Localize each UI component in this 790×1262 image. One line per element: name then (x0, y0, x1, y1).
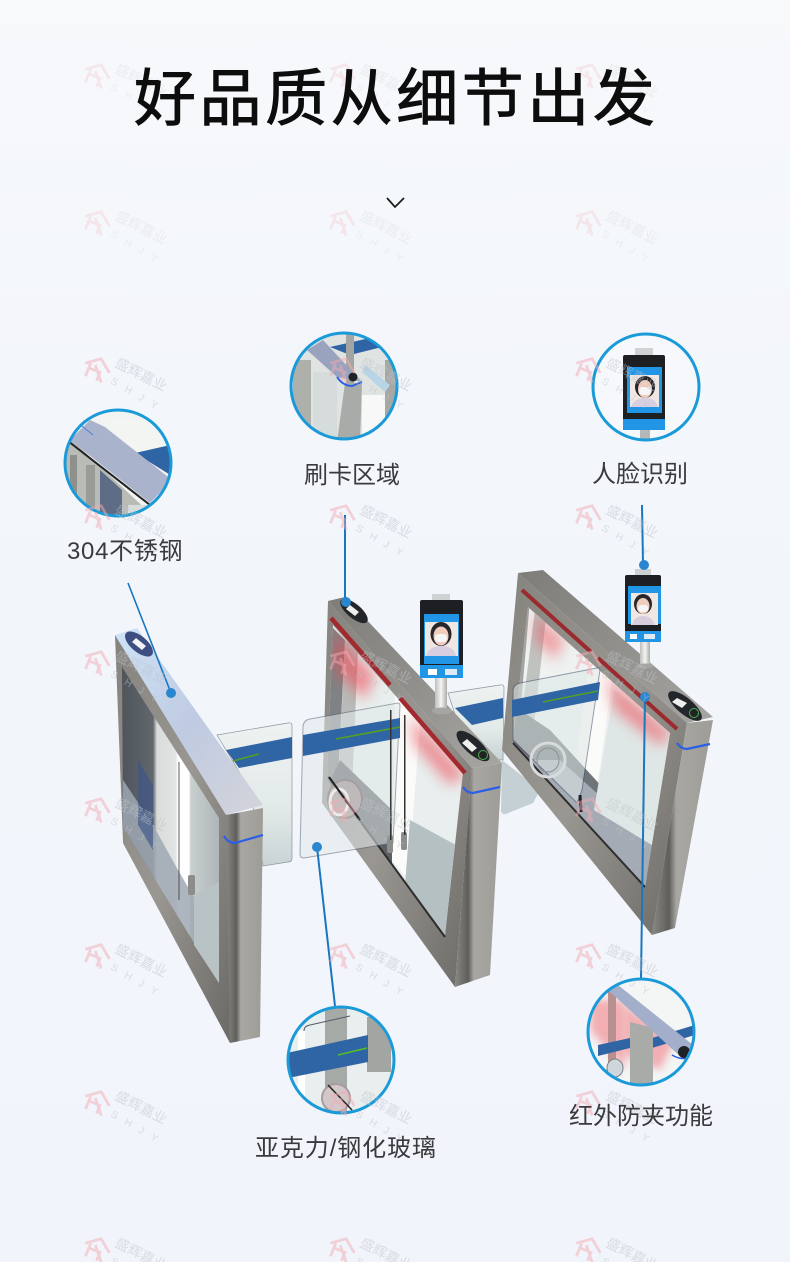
label: face recognition: 人脸识别 (592, 461, 688, 488)
watermarks: SHJY (108, 669, 167, 709)
callout line: infrared (640, 692, 650, 978)
watermarks: 盛辉嘉业 (113, 207, 170, 247)
middle gate acrylic wing (300, 703, 400, 858)
terminal base (637, 664, 653, 668)
watermarks: SHJY (108, 229, 167, 269)
watermarks: 盛辉嘉业 (113, 354, 170, 394)
terminal pole (640, 642, 650, 666)
detail circle: infrared anti-pinch (588, 979, 695, 1090)
watermarks: 盛辉嘉业 (113, 647, 170, 687)
icon: chevron down (387, 198, 404, 207)
watermarks: 盛辉嘉业 (358, 794, 415, 834)
watermarks: SHJY (108, 523, 167, 563)
watermarks: SHJY (108, 1109, 167, 1149)
watermarks: 盛辉嘉业 (113, 501, 170, 541)
left gate hinge (188, 875, 195, 895)
watermarks: SHJY (354, 1109, 412, 1149)
watermarks: SHJY (354, 229, 412, 269)
right gate post (652, 720, 713, 935)
label: card area: 刷卡区域 (304, 462, 400, 489)
watermarks: 盛辉嘉业 (604, 354, 661, 394)
watermarks: 盛辉嘉业 (604, 60, 661, 100)
left gate post (226, 808, 263, 1043)
middle gate card reader back (336, 595, 372, 627)
label: acrylic tempered glass: 亚克力/钢化玻璃 (255, 1135, 437, 1162)
middle gate top face (328, 597, 502, 768)
left gate card reader (121, 627, 157, 661)
watermarks: 盛辉嘉业 (358, 647, 415, 687)
watermarks (81, 60, 661, 1262)
watermarks: 盛辉嘉业 (358, 940, 415, 980)
watermarks: SHJY (600, 82, 658, 122)
watermarks: SHJY (354, 82, 412, 122)
right gate led (677, 743, 710, 749)
middle gate led (463, 787, 500, 793)
terminal camera (432, 594, 450, 601)
watermarks: 盛辉嘉业 (604, 940, 661, 980)
detail circle: face terminal (593, 334, 699, 442)
watermarks: 盛辉嘉业 (358, 501, 415, 541)
watermarks: 盛辉嘉业 (604, 647, 661, 687)
middle gate frame (322, 601, 472, 987)
detail circle: stainless steel (60, 410, 175, 520)
right gate acrylic wing (512, 668, 600, 812)
callout line: face recognition (639, 505, 649, 570)
right gate red infrared strip (522, 590, 677, 729)
watermarks: SHJY (600, 669, 658, 709)
terminal pole (435, 678, 447, 710)
back glass wings (217, 685, 540, 866)
callout line: card area (341, 515, 351, 607)
detail circle: acrylic glass (287, 1006, 394, 1116)
middle gate post (455, 763, 502, 987)
watermarks: SHJY (108, 82, 167, 122)
watermarks: SHJY (600, 816, 658, 856)
right gate frame (502, 573, 687, 935)
right gate top face (518, 570, 713, 723)
terminal body (625, 575, 661, 642)
terminal screen (625, 586, 661, 642)
watermarks: 盛辉嘉业 (358, 1087, 415, 1127)
terminal body (420, 600, 463, 678)
middle gate window (322, 620, 465, 940)
watermarks: SHJY (108, 962, 167, 1002)
left gate top face (115, 628, 263, 815)
left gate frame (115, 635, 230, 1043)
watermarks: SHJY (354, 376, 412, 416)
middle gate (300, 595, 502, 987)
watermarks: 盛辉嘉业 (358, 354, 415, 394)
middle face terminal (420, 594, 463, 714)
watermarks: 盛辉嘉业 (604, 1087, 661, 1127)
terminal base (432, 708, 452, 714)
watermarks: SHJY (600, 1109, 658, 1149)
watermarks: 盛辉嘉业 (604, 794, 661, 834)
right face terminal (625, 569, 661, 668)
watermarks: 盛辉嘉业 (113, 1087, 170, 1127)
watermarks: 盛辉嘉业 (604, 501, 661, 541)
watermarks: 盛辉嘉业 (358, 207, 415, 247)
watermarks: SHJY (600, 962, 658, 1002)
watermarks: 盛辉嘉业 (358, 60, 415, 100)
middle gate card reader front (452, 726, 494, 766)
watermarks: SHJY (108, 376, 167, 416)
left gate led (224, 835, 263, 843)
middle gate red infrared strip (331, 618, 465, 773)
watermarks: 盛辉嘉业 (113, 940, 170, 980)
terminal screen (420, 614, 463, 678)
callout line: stainless steel (128, 583, 176, 698)
watermarks: SHJY (354, 669, 412, 709)
watermarks: SHJY (354, 962, 412, 1002)
watermarks: SHJY (600, 376, 658, 416)
detail circle: card area (290, 332, 400, 442)
watermarks: SHJY (354, 523, 412, 563)
callout line: acrylic glass (312, 842, 335, 1006)
left gate (115, 627, 263, 1043)
watermarks: SHJY (600, 523, 658, 563)
watermarks: SHJY (354, 816, 412, 856)
watermarks: 盛辉嘉业 (113, 794, 170, 834)
label: stainless steel: 304不锈钢 (67, 538, 183, 565)
label: infrared anti-pinch: 红外防夹功能 (569, 1103, 713, 1130)
right gate window (512, 607, 670, 888)
watermarks: SHJY (108, 816, 167, 856)
middle gate hinges (387, 710, 407, 853)
watermarks: SHJY (600, 229, 658, 269)
left gate window (122, 667, 219, 983)
watermarks: 盛辉嘉业 (604, 207, 661, 247)
watermarks: 盛辉嘉业 (113, 60, 170, 100)
terminal camera (635, 569, 651, 575)
right gate card reader (664, 686, 706, 726)
right gate (502, 570, 713, 935)
title: 好品质从细节出发 (134, 65, 658, 134)
